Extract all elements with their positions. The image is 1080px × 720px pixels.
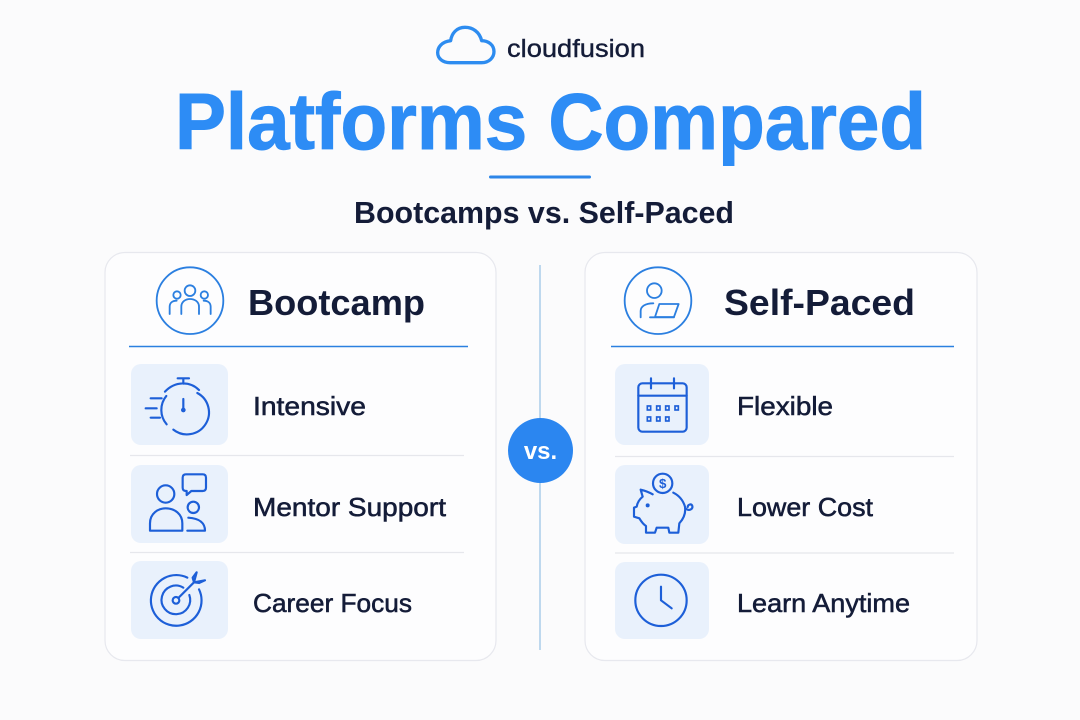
label: Lower Cost [737,492,874,522]
row: Intensive [131,364,366,445]
panel background [585,252,977,660]
row: Mentor Support [131,465,447,543]
row: Learn Anytime [615,562,910,639]
title underline [489,176,591,178]
vs. badge [508,418,573,483]
label: Mentor Support [253,492,447,522]
center divider line [539,265,541,650]
row: Flexible [615,364,833,445]
panel heading: Self-Paced: Self-Paced [724,282,915,323]
icon: calendar [638,378,687,432]
label: Intensive [253,391,366,421]
row: Lower Cost [615,465,874,544]
panel: bootcamp [105,252,496,660]
icon: person with laptop [625,267,691,334]
row: Career Focus [131,561,412,639]
icon: piggy bank with coin [634,474,692,533]
icon: mentor and mentee [150,474,206,531]
label: Career Focus [253,588,412,618]
icon: piggy bank with coin: $ [659,476,667,491]
label: Flexible [737,391,833,421]
panel background [105,252,496,660]
icon: clock [635,575,687,626]
icon: cloud [438,27,494,63]
icon: target with arrow [151,572,205,626]
subtitle: Bootcamps vs. Self-Paced [354,195,734,230]
panel: self-paced [585,252,977,660]
title: Platforms Compared [175,77,926,166]
logo: cloudfusion [438,27,645,63]
icon: stopwatch [146,378,209,434]
logo wordmark: cloudfusion [507,35,645,63]
label: Learn Anytime [737,588,910,618]
icon: group of people [157,267,223,334]
vs. badge: vs. [524,438,557,465]
panel heading: Bootcamp: Bootcamp [248,282,425,323]
